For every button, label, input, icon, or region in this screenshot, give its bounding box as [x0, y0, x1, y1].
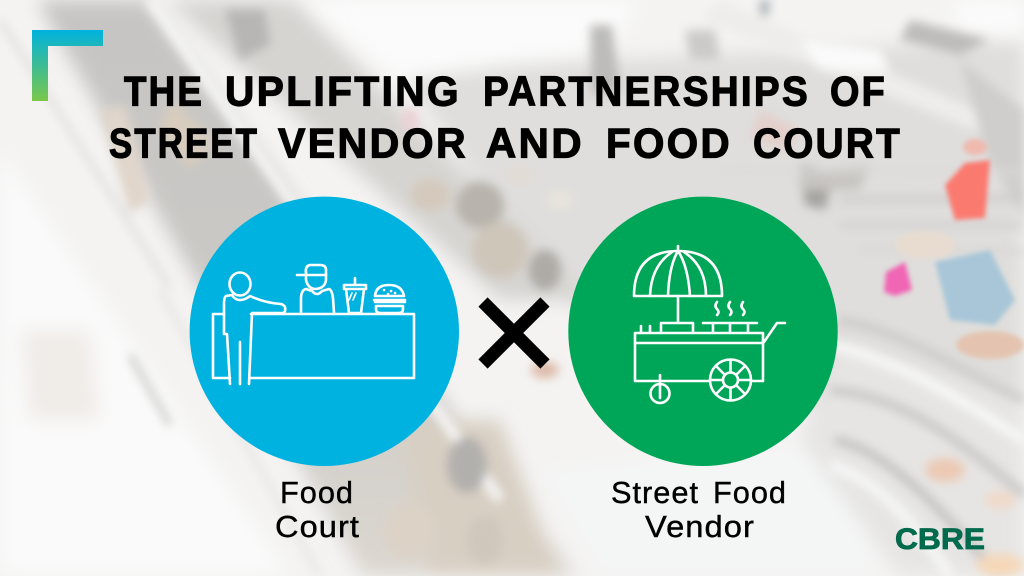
title: STREET: [109, 120, 259, 166]
label: street food vendor: Street: [611, 475, 699, 510]
title: UPLIFTING: [225, 68, 461, 114]
title: COURT: [753, 120, 902, 166]
icon: food cart with umbrella: [634, 246, 785, 403]
centre crowd: [402, 108, 418, 132]
CBRE logo: CBRE: [895, 523, 985, 556]
upper right details: [590, 25, 620, 95]
title: AND: [486, 120, 584, 166]
label: food court: [275, 475, 360, 544]
grey band details: [225, 10, 270, 60]
title: PARTNERSHIPS: [483, 68, 810, 114]
title: OF: [830, 68, 887, 114]
blue figure: [935, 250, 1015, 325]
icon: food court counter with customer and server: [213, 265, 414, 384]
title: [109, 68, 902, 166]
lower centre shading: [447, 437, 487, 493]
label: food court: Food: [280, 475, 354, 510]
multiply sign: [483, 302, 545, 364]
pink figure: [884, 262, 912, 296]
label: street food vendor: [611, 475, 787, 544]
title: VENDOR: [278, 120, 468, 166]
lower right escalator streaks: [838, 320, 1024, 400]
corner bracket logo mark: [32, 30, 103, 101]
label: street food vendor: Vendor: [645, 509, 755, 544]
title: THE: [124, 68, 204, 114]
circle: street food vendor: [568, 197, 838, 466]
circle: food court: [190, 197, 459, 466]
label: food court: Court: [275, 509, 360, 544]
label: street food vendor: Food: [713, 475, 787, 510]
title: FOOD: [606, 120, 732, 166]
left rails: [0, 20, 170, 288]
red figure: [945, 160, 990, 220]
